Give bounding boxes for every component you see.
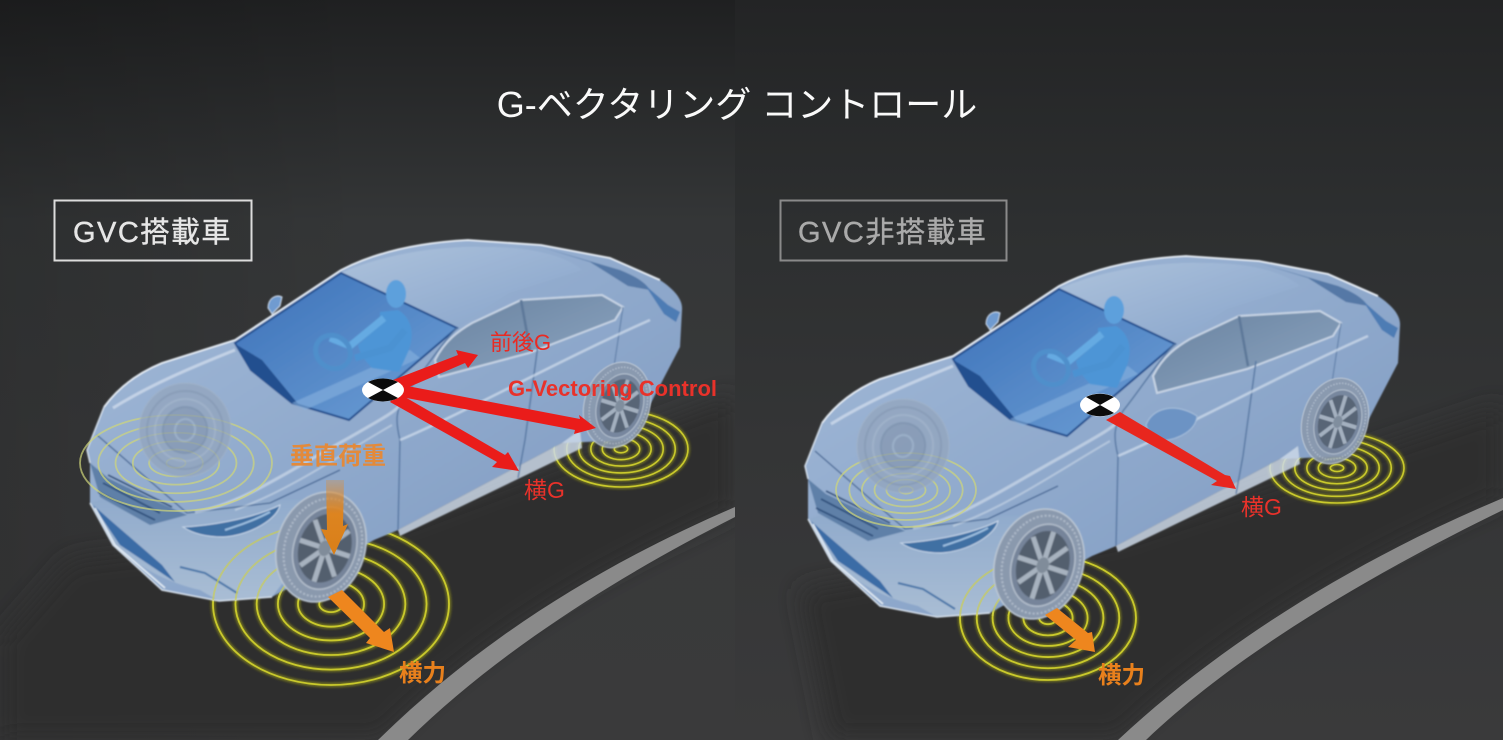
arrow: left lateral force: [328, 590, 394, 652]
label: right 横G: 横G: [1241, 494, 1282, 520]
rings: left rear wheel: [554, 411, 688, 487]
label: right 横力: 横力: [1098, 662, 1145, 688]
rings: right front wheel: [960, 556, 1136, 680]
rings: right hidden front wheel: [836, 453, 976, 527]
icon: left center of gravity marker: [362, 378, 404, 402]
icon: right side mirror: [1146, 408, 1197, 441]
arrow: left lateral G: [390, 393, 519, 471]
label: left 横力: 横力: [399, 660, 446, 686]
arrow: left vertical load: [321, 480, 348, 555]
wheel: left front: [262, 480, 380, 614]
label: G-Vectoring Control: G-Vectoring Control: [508, 376, 717, 401]
rings: right front wheel over bumper: [959, 568, 1008, 616]
road: left: [104, 404, 735, 740]
rings: left hidden front wheel: [80, 415, 272, 511]
arrow: right lateral G: [1106, 412, 1236, 489]
label: 前後G: 前後G: [490, 330, 551, 355]
arrow: right lateral force: [1045, 608, 1095, 652]
rings: left front wheel: [213, 523, 449, 685]
arrow: left G-Vectoring Control: [396, 385, 596, 434]
label box: GVC非搭載車: GVC非搭載車: [798, 216, 987, 249]
wheel: left hidden front: [129, 373, 241, 487]
wheel: left rear: [573, 354, 661, 456]
rings: left front wheel over bumper: [212, 530, 286, 600]
wheel: right hidden front: [847, 389, 959, 503]
wheel: right front: [980, 497, 1098, 631]
illustration: right car: [805, 256, 1400, 617]
label box: GVC搭載車: GVC搭載車: [73, 216, 232, 249]
title: G-ベクタリング コントロール: [497, 84, 977, 125]
arrow: left longitudinal G: [393, 350, 478, 390]
panel: left background: [0, 0, 735, 740]
label: 垂直荷重: 垂直荷重: [290, 443, 386, 470]
label box: GVC非搭載車: [780, 200, 1006, 260]
label box: GVC搭載車: [54, 200, 252, 260]
panel: right background: [735, 0, 1503, 740]
rings: right rear wheel: [1270, 433, 1404, 503]
label: left 横G: 横G: [524, 477, 565, 503]
wheel: right rear: [1291, 370, 1379, 472]
icon: right center of gravity marker: [1080, 394, 1120, 416]
illustration: left car: [87, 240, 682, 601]
road: right: [800, 405, 1503, 740]
